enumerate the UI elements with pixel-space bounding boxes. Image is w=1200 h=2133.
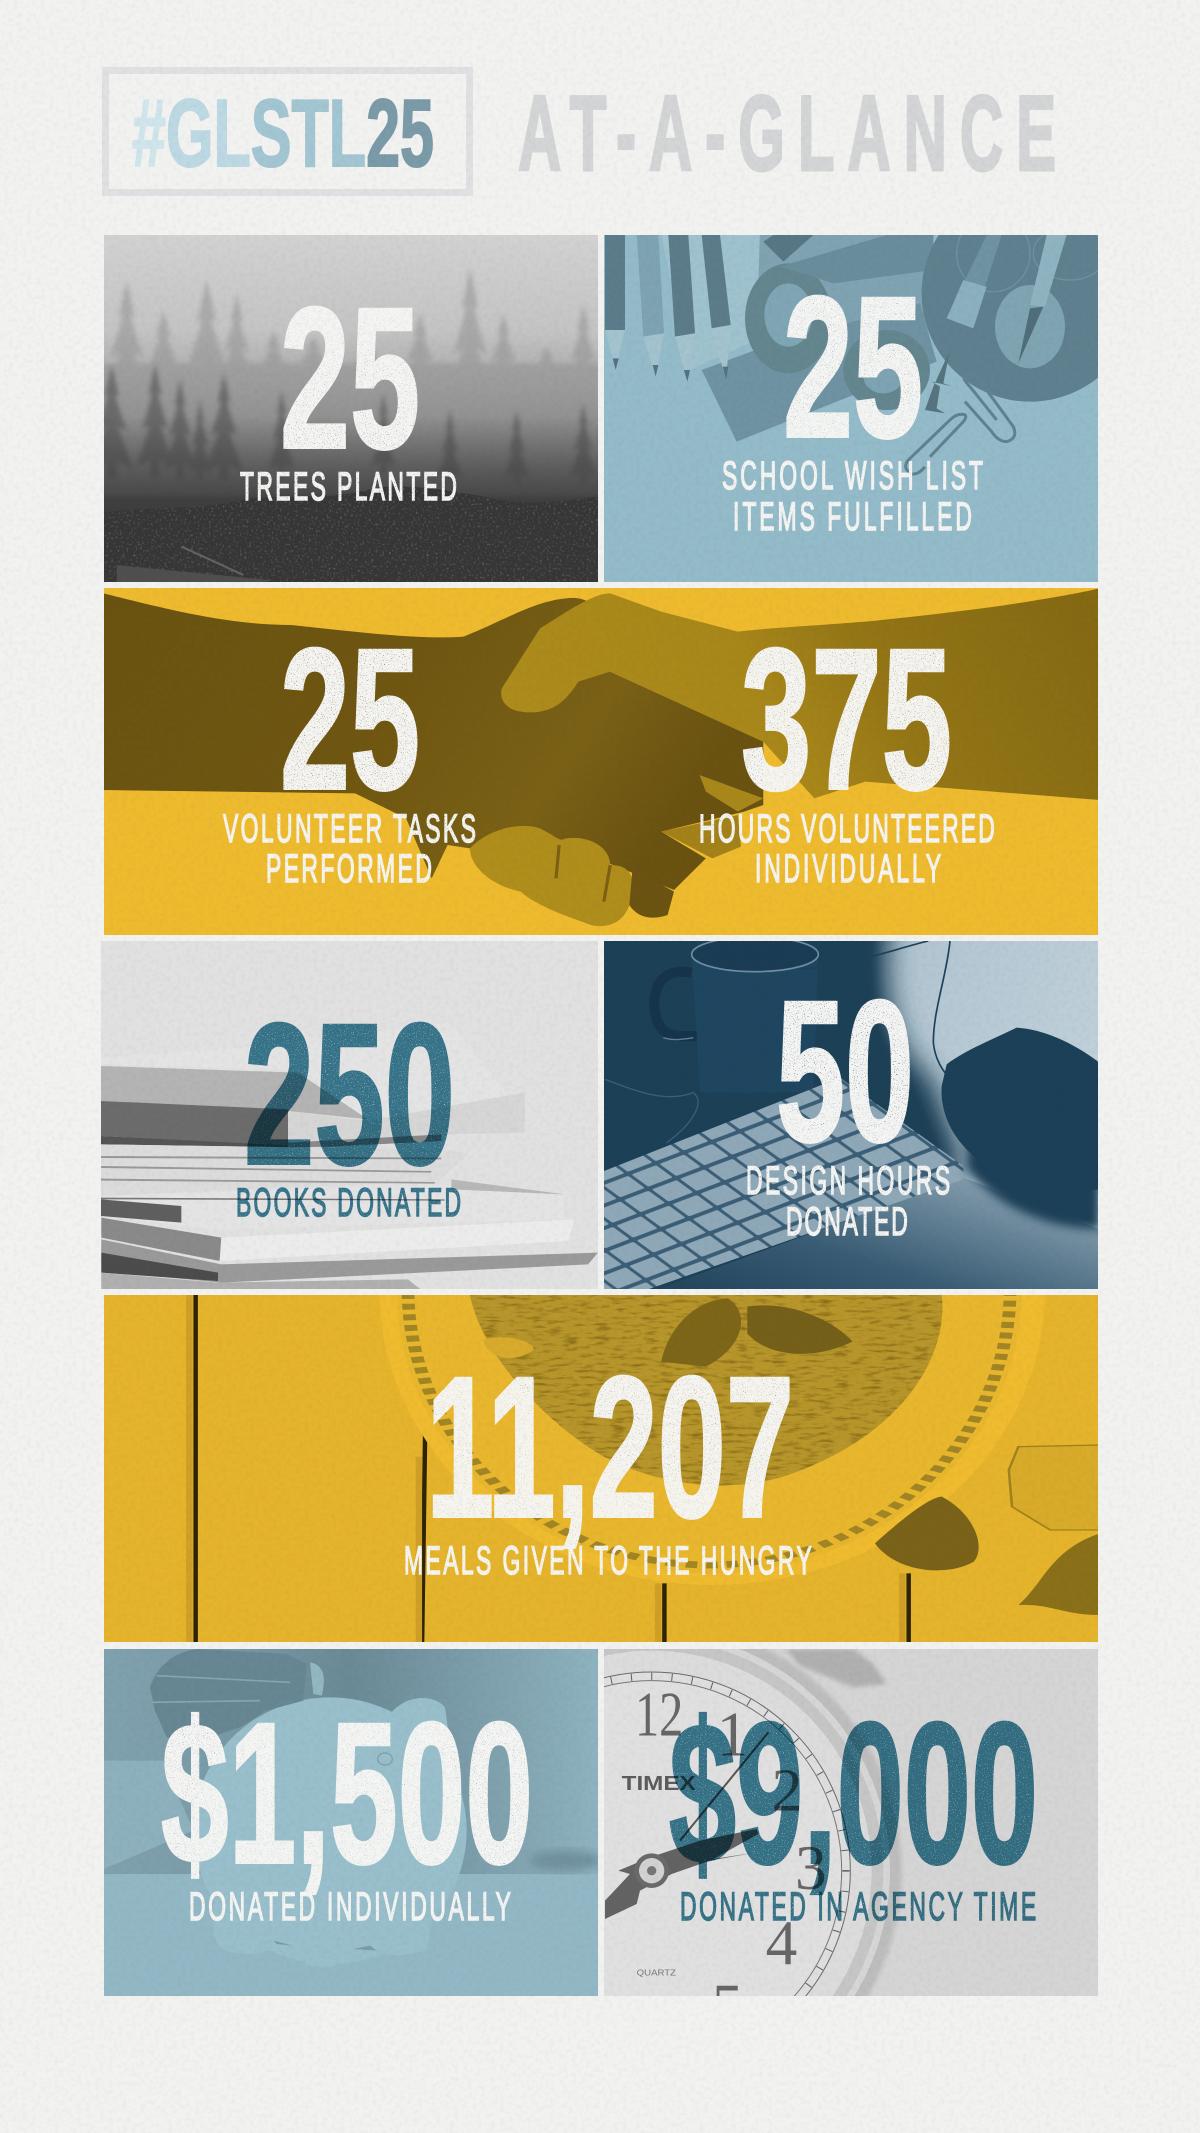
label: design hours donated: DESIGN HOURS bbox=[746, 1159, 950, 1203]
photo: keyboard, mug and mouse bbox=[604, 941, 1098, 1289]
label: design hours donated bbox=[746, 1159, 950, 1244]
label: hours volunteered individually bbox=[699, 807, 995, 891]
photo: pasta plate on table bbox=[104, 1295, 1098, 1642]
number: 11,207: 11,207 bbox=[426, 1334, 794, 1560]
photo: alarm clock: 12 bbox=[635, 1680, 683, 1750]
badge frame bbox=[106, 70, 470, 192]
label: school wish list items fulfilled: SCHOOL WISH LIST bbox=[722, 454, 983, 498]
photo: alarm clock: 4 bbox=[766, 1908, 797, 1978]
number: 25: 25 bbox=[280, 606, 420, 832]
number: 50: 50 bbox=[776, 958, 914, 1184]
label: hours volunteered individually: HOURS VOLUNTEERED bbox=[699, 807, 995, 851]
panel: volunteering bbox=[100, 585, 1100, 940]
label: meals given to the hungry: MEALS GIVEN TO THE HUNGRY bbox=[404, 1539, 812, 1583]
label: school wish list items fulfilled: ITEMS FULFILLED bbox=[733, 495, 972, 539]
photo: alarm clock: 2 bbox=[772, 1757, 802, 1825]
hashtag text: #GLSTL25 bbox=[132, 80, 434, 187]
label: donated individually: DONATED INDIVIDUALLY bbox=[189, 1885, 511, 1929]
photo: stack of books bbox=[98, 936, 601, 1296]
label: volunteer tasks performed: VOLUNTEER TASKS bbox=[223, 807, 476, 851]
label: design hours donated: DONATED bbox=[786, 1200, 908, 1244]
label: volunteer tasks performed bbox=[223, 807, 476, 891]
panel: trees planted bbox=[90, 230, 601, 590]
number: $1,500: $1,500 bbox=[161, 1680, 533, 1906]
number: 375: 375 bbox=[741, 606, 952, 832]
photo: alarm clock: 5 bbox=[712, 1971, 743, 2041]
photo: alarm clock: 1 bbox=[717, 1700, 748, 1770]
panel: donated individually bbox=[100, 1644, 602, 2004]
label: volunteer tasks performed: PERFORMED bbox=[266, 847, 432, 891]
panel: donated in agency time bbox=[604, 1649, 1098, 1996]
photo: misty forest bbox=[90, 230, 601, 590]
photo: alarm clock: 3 bbox=[795, 1833, 827, 1903]
label: trees planted: TREES PLANTED bbox=[240, 465, 457, 509]
photo: handshake bbox=[100, 585, 1100, 940]
panel: meals given bbox=[104, 1295, 1098, 1642]
label: school wish list items fulfilled bbox=[722, 454, 983, 539]
number: 25: 25 bbox=[783, 254, 923, 480]
photo: piggy bank bbox=[100, 1644, 602, 2004]
panel: books donated bbox=[98, 936, 601, 1296]
label: donated in agency time: DONATED IN AGENCY TIME bbox=[680, 1885, 1036, 1929]
number: 250: 250 bbox=[244, 982, 455, 1206]
title: at-a-glance: AT-A-GLANCE bbox=[518, 75, 1056, 193]
photo: alarm clock: QUARTZ bbox=[637, 1968, 677, 1978]
number: 25: 25 bbox=[280, 266, 420, 490]
label: books donated: BOOKS DONATED bbox=[236, 1181, 461, 1225]
photo: school supplies bbox=[604, 235, 1098, 582]
hashtag badge bbox=[106, 70, 470, 192]
label: hours volunteered individually: INDIVIDUALLY bbox=[755, 847, 941, 891]
panel: design hours donated bbox=[604, 941, 1098, 1289]
photo: alarm clock bbox=[604, 1649, 1098, 1996]
photo: alarm clock: TIMEX bbox=[622, 1772, 696, 1795]
panel: school wish list bbox=[604, 235, 1098, 582]
